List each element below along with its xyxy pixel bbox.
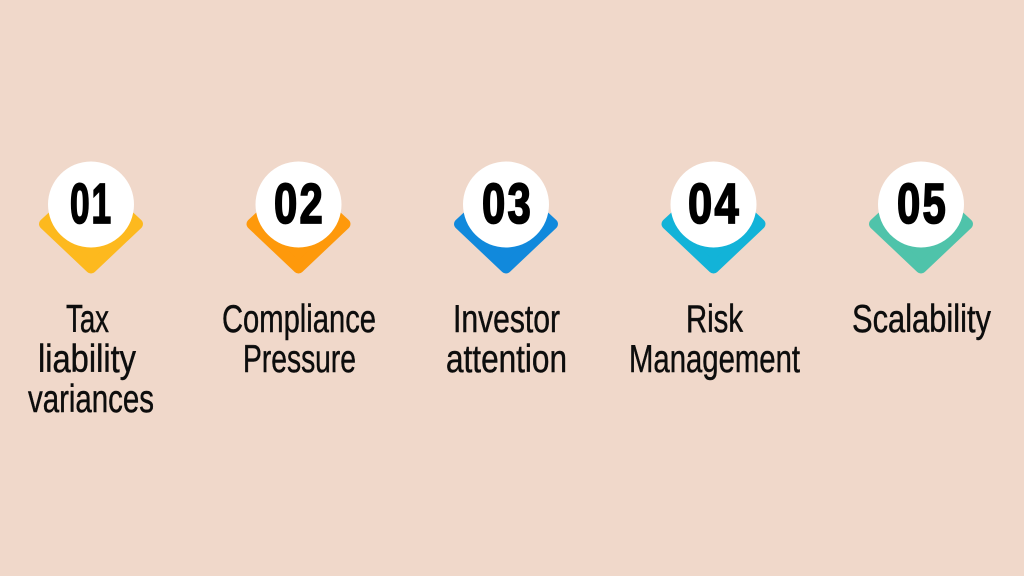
number 05: 05	[897, 172, 948, 236]
step 5: scalability	[852, 162, 991, 341]
step 2: compliance pressure	[222, 162, 376, 381]
label: compliance pressure: Compliance	[222, 298, 376, 341]
icon: blue diamond	[460, 181, 552, 268]
icon: yellow diamond	[44, 181, 138, 268]
white number circle	[256, 162, 342, 248]
label: tax liability variances: liability	[38, 338, 136, 381]
number 01: 01	[70, 172, 113, 236]
step 1: tax liability variances	[28, 162, 154, 421]
label: tax liability variances: variances	[28, 378, 154, 421]
step 3: investor attention	[446, 162, 567, 381]
white number circle	[878, 162, 964, 248]
label: investor attention	[446, 298, 567, 381]
number 02: 02	[274, 172, 325, 236]
label: risk management: Risk	[686, 298, 743, 341]
label: investor attention: Investor	[453, 298, 560, 341]
label: compliance pressure: Pressure	[243, 338, 356, 381]
icon: teal diamond	[874, 181, 968, 268]
icon: cyan diamond	[667, 181, 760, 268]
number 03: 03	[482, 172, 533, 236]
label: risk management: Management	[629, 338, 800, 381]
icon: orange diamond	[252, 181, 345, 268]
label: tax liability variances	[28, 298, 154, 421]
number 04: 04	[688, 172, 741, 236]
label: investor attention: attention	[446, 338, 567, 381]
label: tax liability variances: Tax	[66, 298, 109, 341]
label: risk management	[629, 298, 800, 381]
white number circle	[48, 162, 134, 248]
step 4: risk management	[629, 162, 800, 381]
white number circle	[670, 162, 756, 248]
label: scalability: Scalability	[852, 298, 991, 341]
label: compliance pressure	[222, 298, 376, 381]
white number circle	[463, 162, 549, 248]
